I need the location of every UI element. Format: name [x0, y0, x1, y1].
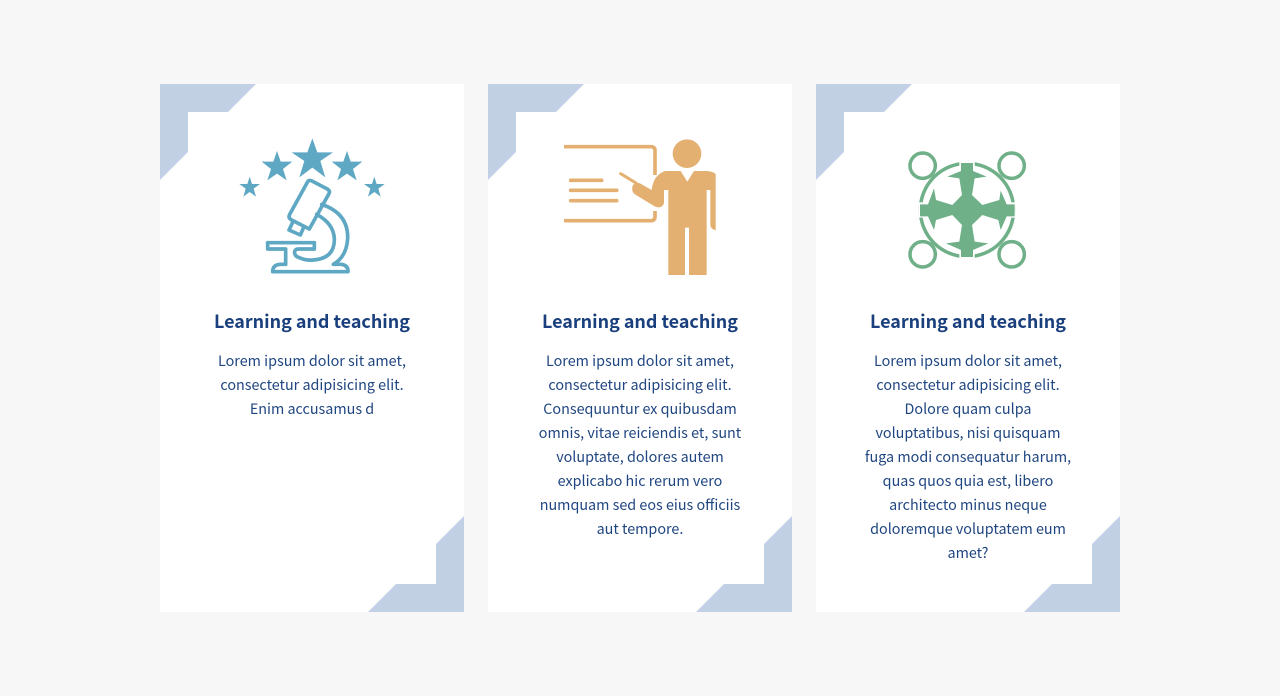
heading: Learning and teaching: [870, 308, 1066, 334]
body text: numquam sed eos eius officiis: [540, 494, 740, 515]
heading: Learning and teaching: [542, 308, 738, 334]
icon: teacher at board: [564, 139, 716, 275]
body text: Dolore quam culpa: [905, 398, 1031, 419]
body text: quas quos quia est, libero: [883, 470, 1053, 491]
panel: card 2: [488, 84, 792, 612]
body text: consectetur adipisicing elit.: [876, 374, 1060, 395]
corner decorations: [160, 84, 464, 612]
body text: fuga modi consequatur harum,: [865, 446, 1071, 467]
body text: [218, 350, 406, 419]
body text: Lorem ipsum dolor sit amet,: [218, 350, 406, 371]
body text: architecto minus neque: [889, 494, 1047, 515]
corner decorations: [488, 84, 792, 612]
body text: omnis, vitae reiciendis et, sunt: [539, 422, 741, 443]
body text: explicabo hic rerum vero: [558, 470, 722, 491]
body text: voluptatibus, nisi quisquam: [875, 422, 1061, 443]
body text: [539, 350, 741, 539]
heading: Learning and teaching: [214, 308, 410, 334]
body text: consectetur adipisicing elit.: [220, 374, 404, 395]
body text: doloremque voluptatem eum: [870, 518, 1066, 539]
body text: [865, 350, 1071, 563]
body text: Lorem ipsum dolor sit amet,: [874, 350, 1062, 371]
body text: amet?: [948, 542, 988, 563]
body text: consectetur adipisicing elit.: [548, 374, 732, 395]
panel: card 1: [160, 84, 464, 612]
body text: aut tempore.: [597, 518, 683, 539]
body text: Enim accusamus d: [250, 398, 374, 419]
panel: card 3: [816, 84, 1120, 612]
icon: microscope with stars: [240, 138, 384, 274]
body text: Lorem ipsum dolor sit amet,: [546, 350, 734, 371]
body text: voluptate, dolores autem: [556, 446, 724, 467]
corner decorations: [816, 84, 1120, 612]
body text: Consequuntur ex quibusdam: [543, 398, 737, 419]
icon: connected network circle: [908, 151, 1026, 269]
